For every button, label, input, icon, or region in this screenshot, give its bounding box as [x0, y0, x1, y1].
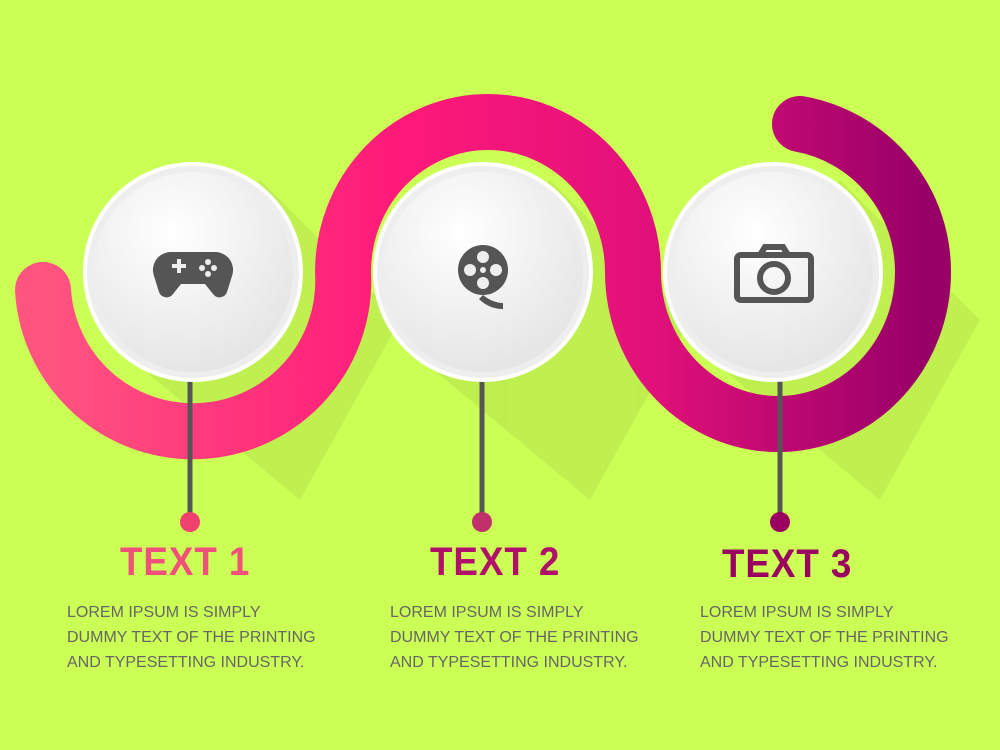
stems	[190, 375, 780, 520]
dots	[180, 512, 200, 532]
text 2: AND TYPESETTING INDUSTRY.	[390, 654, 627, 671]
circle 1	[85, 164, 301, 380]
text 3: AND TYPESETTING INDUSTRY.	[700, 654, 937, 671]
text 1: LOREM IPSUM IS SIMPLY	[67, 604, 261, 621]
text 3: LOREM IPSUM IS SIMPLY	[700, 604, 894, 621]
circle 2	[375, 164, 591, 380]
text 1: AND TYPESETTING INDUSTRY.	[67, 654, 304, 671]
title 2: TEXT 2	[430, 540, 560, 584]
circle 3	[665, 164, 881, 380]
title 1: TEXT 1	[120, 540, 250, 584]
text 3	[700, 604, 949, 671]
wave ribbon	[43, 122, 923, 431]
icon: camera	[737, 247, 811, 300]
icon: film reel	[458, 245, 508, 309]
shadows	[120, 180, 980, 500]
text 1	[67, 604, 316, 671]
text 1: DUMMY TEXT OF THE PRINTING	[67, 629, 316, 646]
title 3: TEXT 3	[722, 542, 852, 586]
text 2: DUMMY TEXT OF THE PRINTING	[390, 629, 639, 646]
icon: gamepad	[153, 252, 233, 297]
text 3: DUMMY TEXT OF THE PRINTING	[700, 629, 949, 646]
text 2	[390, 604, 639, 671]
text 2: LOREM IPSUM IS SIMPLY	[390, 604, 584, 621]
